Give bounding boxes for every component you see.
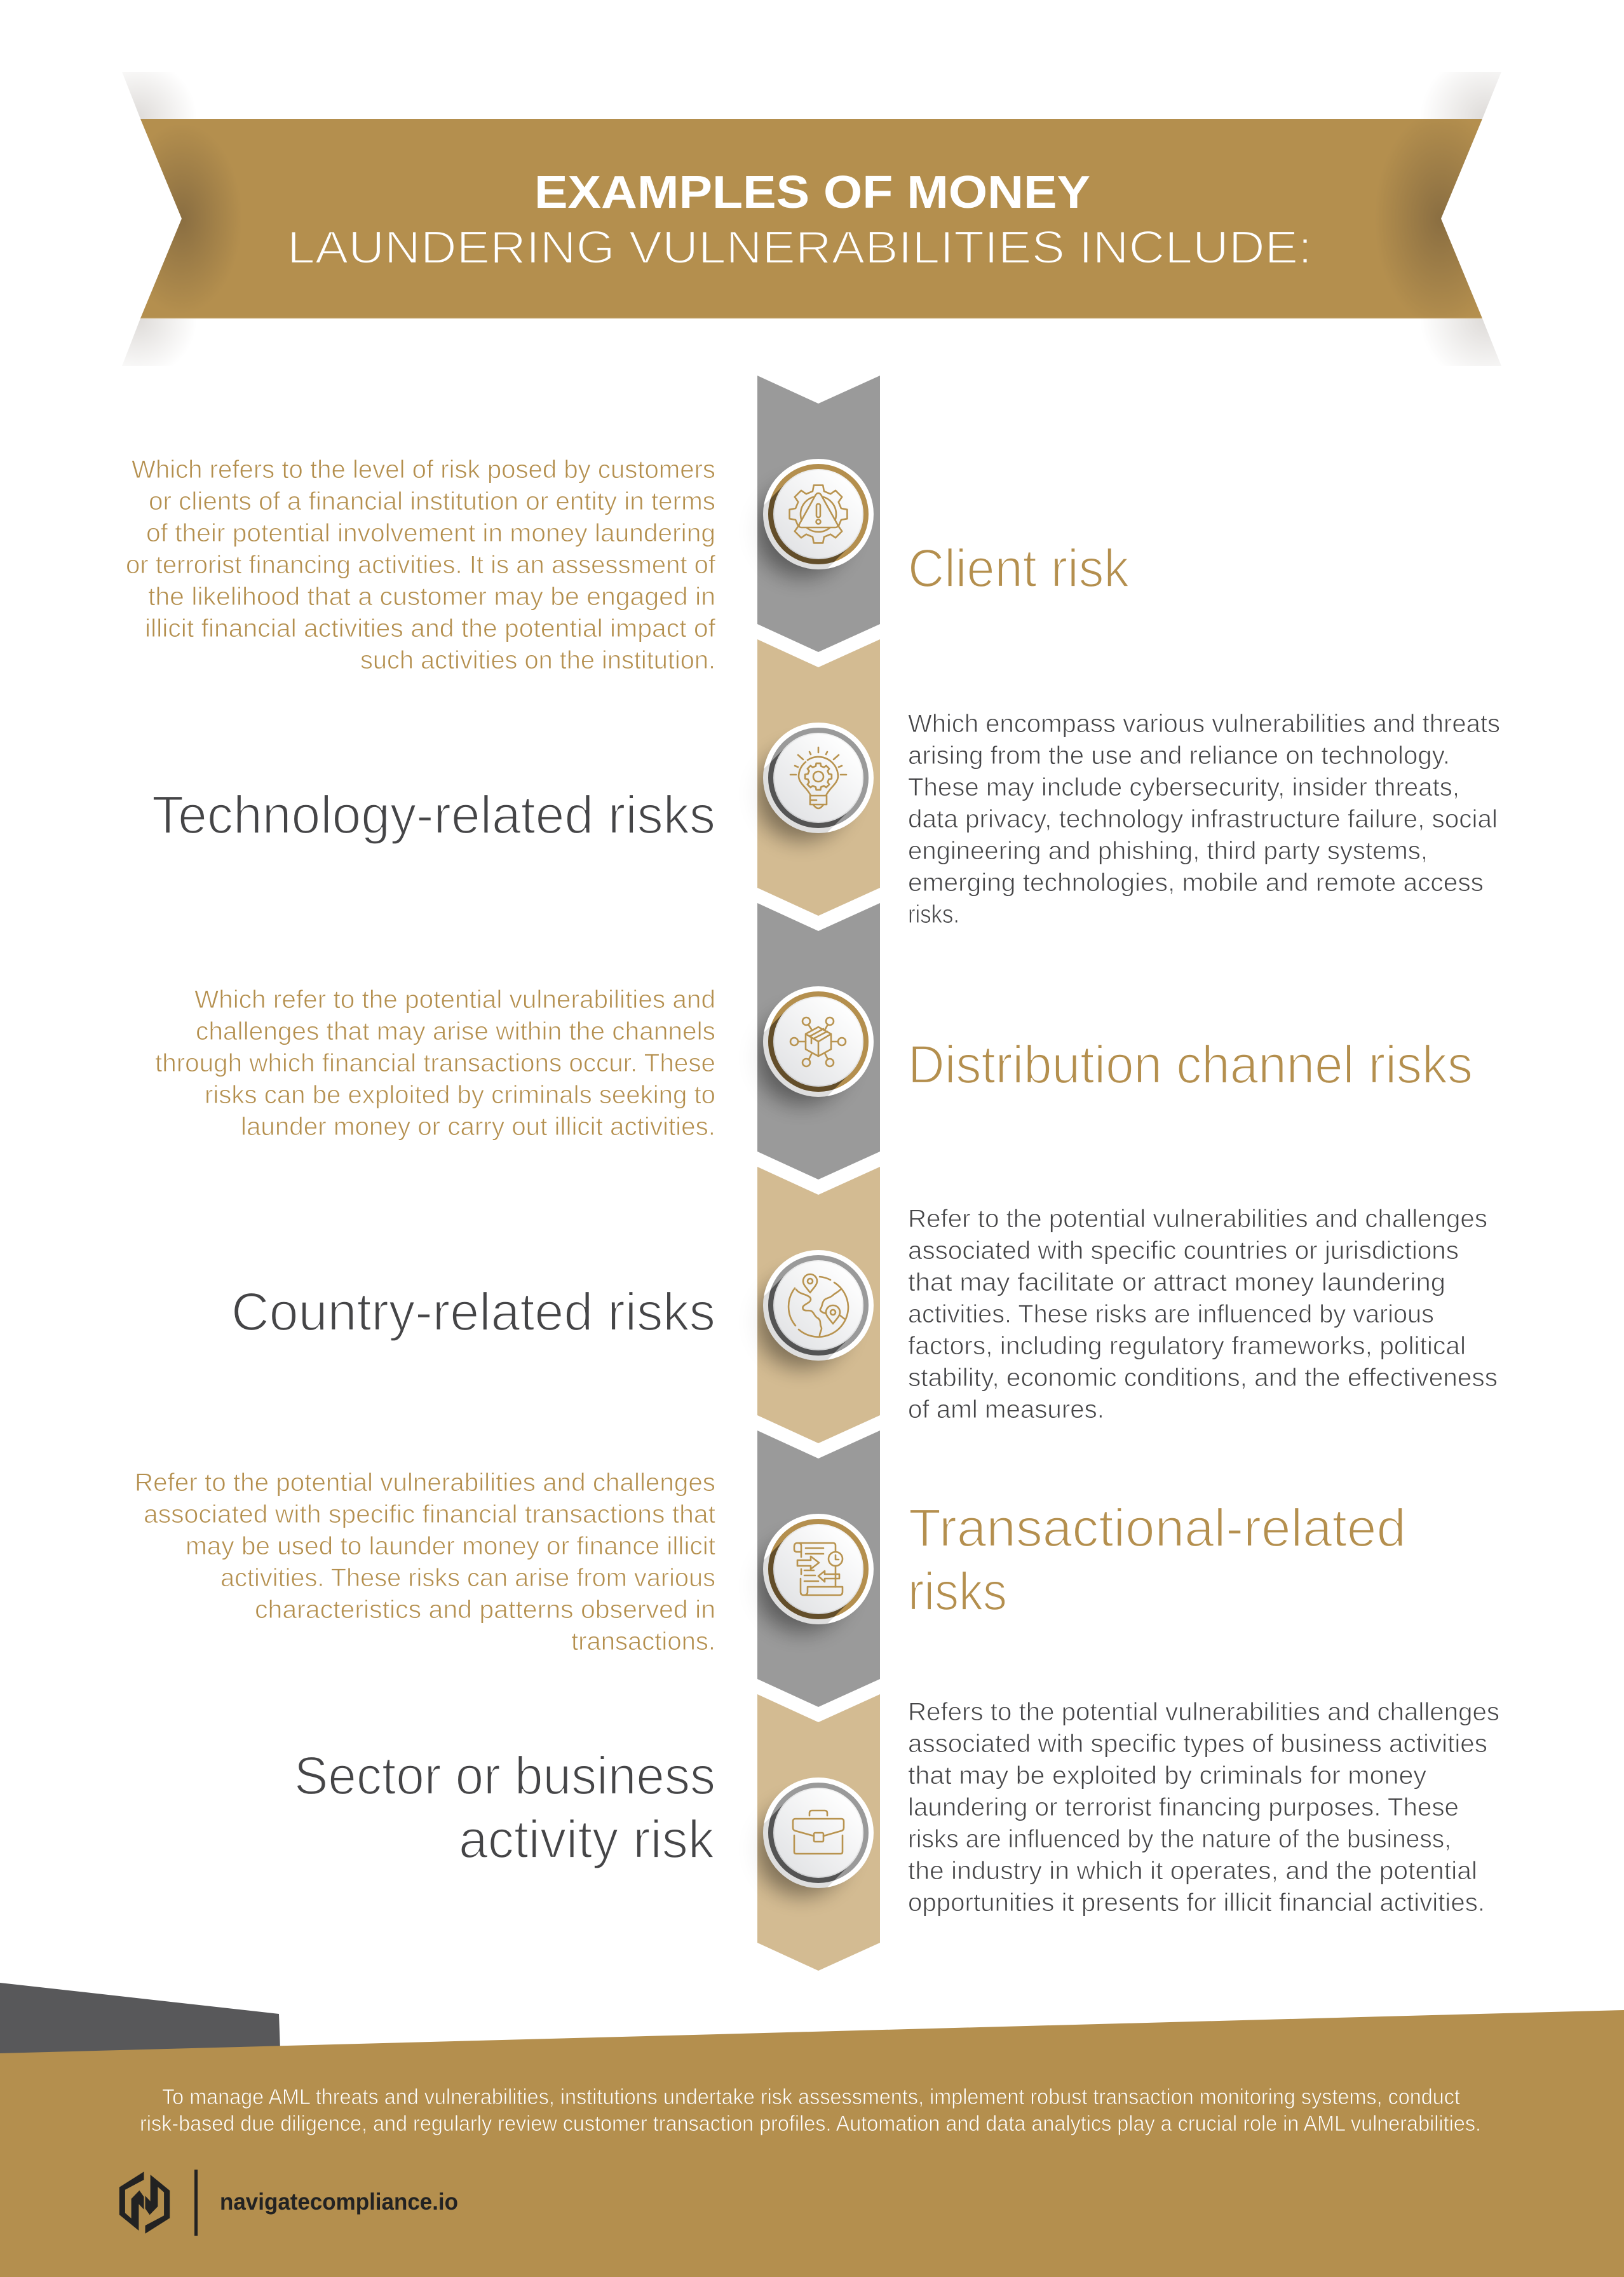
website: navigatecompliance.io (220, 2189, 458, 2215)
description: sector or business activity risk: that may be exploited by criminals for money (908, 1762, 1426, 1790)
panel: country-related risks (231, 1167, 1498, 1443)
chevron: sector (757, 1694, 880, 1971)
description: client risk: such activities on the institution. (360, 646, 715, 674)
footer note: risk-based due diligence, and regularly review customer transaction profiles. Automation and data analytics play a crucial role in AML vulnerabilities. (140, 2112, 1481, 2136)
description: client risk (126, 456, 716, 674)
title banner (122, 72, 1501, 366)
heading: sector or business activity risk (294, 1746, 715, 1869)
description: transactional-related risks: transactions. (571, 1628, 715, 1655)
description: client risk: Which refers to the level of risk posed by customers (132, 456, 715, 484)
description: technology-related risks: Which encompass various vulnerabilities and threats (908, 710, 1500, 738)
icon badge: lightbulb gear (742, 723, 874, 854)
icon: navigate compliance logo (119, 2172, 170, 2234)
footer (0, 1983, 1624, 2277)
title text: EXAMPLES OF MONEY (534, 167, 1090, 218)
description: country-related risks: that may facilitate or attract money laundering (908, 1268, 1445, 1296)
icon badge: gear warning (742, 459, 874, 590)
description: technology-related risks: arising from the use and reliance on technology. (908, 742, 1450, 770)
heading: transactional-related risks: risks (908, 1561, 1007, 1621)
description: sector or business activity risk: risks are influenced by the nature of the business, (908, 1825, 1451, 1853)
description: distribution channel risks: challenges that may arise within the channels (196, 1017, 715, 1045)
description: technology-related risks: data privacy, technology infrastructure failure, social (908, 805, 1498, 833)
description: client risk: or terrorist financing activities. It is an assessment of (126, 551, 716, 579)
chevron: transactional (757, 1431, 880, 1707)
description: technology-related risks: emerging technologies, mobile and remote access (908, 869, 1484, 897)
chevron: client risk (757, 376, 880, 652)
panel: client risk (126, 376, 1130, 674)
description: distribution channel risks: risks can be exploited by criminals seeking to (205, 1081, 715, 1109)
description: sector or business activity risk: associated with specific types of business activities (908, 1730, 1487, 1758)
chevron: country (757, 1167, 880, 1443)
title text (287, 167, 1312, 273)
chevron: distribution (757, 903, 880, 1179)
description: transactional-related risks: characteristics and patterns observed in (255, 1596, 715, 1624)
description: transactional-related risks (135, 1469, 715, 1655)
description: sector or business activity risk: opportunities it presents for illicit financial activities. (908, 1889, 1485, 1917)
heading: distribution channel risks: Distribution channel risks (908, 1035, 1473, 1094)
footer note: To manage AML threats and vulnerabilities, institutions undertake risk assessments, implement robust transaction monitoring systems, conduct (162, 2085, 1461, 2109)
heading: client risk: Client risk (908, 538, 1130, 598)
description: country-related risks: activities. These risks are influenced by various (908, 1300, 1434, 1328)
description: country-related risks: stability, economic conditions, and the effectiveness (908, 1364, 1498, 1392)
dark corner shape (0, 1983, 280, 2056)
description: technology-related risks (908, 710, 1500, 928)
panel: distribution channel risks (155, 903, 1473, 1179)
description: technology-related risks: These may include cybersecurity, insider threats, (908, 773, 1459, 801)
description: country-related risks: associated with specific countries or jurisdictions (908, 1237, 1459, 1265)
description: country-related risks: of aml measures. (908, 1396, 1104, 1424)
footer note (140, 2085, 1481, 2136)
heading: sector or business activity risk: activity risk (459, 1809, 715, 1869)
description: transactional-related risks: may be used to launder money or finance illicit (186, 1532, 715, 1560)
description: distribution channel risks: Which refer to the potential vulnerabilities and (194, 986, 715, 1014)
logo divider (194, 2170, 198, 2236)
footer background (0, 2010, 1624, 2277)
description: client risk: illicit financial activities and the potential impact of (145, 615, 716, 642)
description: sector or business activity risk: the industry in which it operates, and the potential (908, 1857, 1477, 1885)
description: client risk: of their potential involvement in money laundering (146, 519, 715, 547)
description: client risk: or clients of a financial institution or entity in terms (149, 487, 715, 515)
icon badge: globe with pins (742, 1250, 874, 1382)
description: distribution channel risks: launder money or carry out illicit activities. (241, 1113, 715, 1141)
heading: sector or business activity risk: Sector or business (294, 1746, 715, 1805)
panel: sector or business activity risk (294, 1694, 1499, 1971)
description: transactional-related risks: Refer to the potential vulnerabilities and challenges (135, 1469, 715, 1497)
heading: transactional-related risks: Transactional-related (909, 1498, 1406, 1558)
description: country-related risks: Refer to the potential vulnerabilities and challenges (908, 1205, 1487, 1233)
icon badge: network box (742, 986, 874, 1118)
description: transactional-related risks: associated with specific financial transactions that (144, 1500, 715, 1528)
panel: transactional-related risks (135, 1431, 1406, 1707)
description: country-related risks (908, 1205, 1498, 1424)
panel: technology-related risks (152, 639, 1500, 928)
description: sector or business activity risk (908, 1698, 1499, 1917)
description: transactional-related risks: activities. These risks can arise from various (220, 1564, 715, 1592)
icon badge: transaction scroll (742, 1514, 874, 1645)
chevron: technology (757, 639, 880, 916)
description: country-related risks: factors, including regulatory frameworks, political (908, 1332, 1466, 1360)
description: distribution channel risks: through which financial transactions occur. These (155, 1049, 715, 1077)
icon badge: briefcase (742, 1777, 874, 1909)
description: sector or business activity risk: Refers to the potential vulnerabilities and challenges (908, 1698, 1499, 1726)
heading: country-related risks: Country-related risks (231, 1282, 715, 1342)
title text: LAUNDERING VULNERABILITIES INCLUDE: (287, 222, 1312, 273)
description: sector or business activity risk: laundering or terrorist financing purposes. These (908, 1793, 1459, 1821)
description: distribution channel risks (155, 986, 715, 1141)
heading: transactional-related risks (908, 1498, 1406, 1621)
description: client risk: the likelihood that a customer may be engaged in (148, 583, 715, 611)
description: technology-related risks: engineering and phishing, third party systems, (908, 837, 1428, 865)
heading: technology-related risks: Technology-related risks (152, 785, 715, 845)
description: technology-related risks: risks. (908, 901, 959, 928)
